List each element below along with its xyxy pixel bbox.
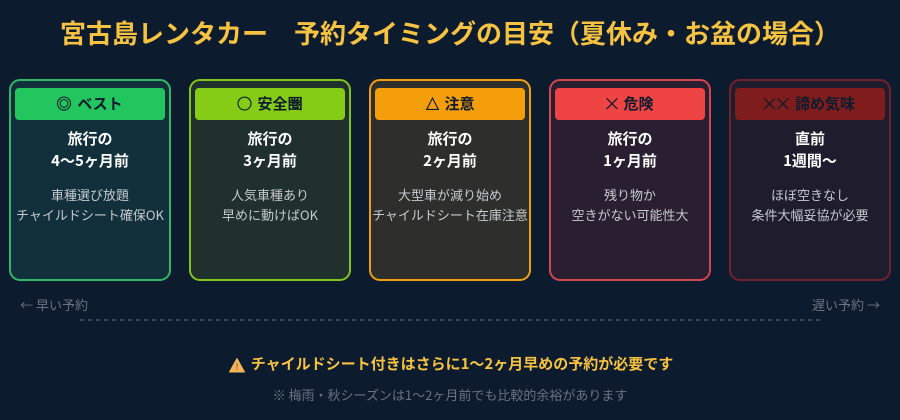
label: give up: 諦め気味 (795, 93, 855, 114)
footnote: ※ 梅雨・秋シーズンは1〜2ヶ月前でも比較的余裕があります (273, 385, 627, 404)
timing: caution (423, 128, 477, 171)
label: danger (555, 88, 705, 120)
description: caution (372, 185, 528, 224)
label: later booking: 遅い予約 → (812, 295, 880, 314)
panel: best (10, 80, 170, 280)
panel: give up (730, 80, 890, 280)
description: safe (222, 185, 319, 224)
label: earlier booking: ← 早い予約 (20, 295, 88, 314)
panel: danger (550, 80, 710, 280)
label: caution: △ (424, 96, 441, 113)
label: danger: × (603, 90, 621, 116)
description: danger: 空きがない可能性大 (571, 205, 689, 224)
label: best: ◎ (56, 96, 72, 113)
timing: caution: 旅行の (427, 128, 473, 149)
timing: caution: 2ヶ月前 (423, 150, 477, 171)
panel: caution (370, 80, 530, 280)
description: best: 車種選び放題 (51, 185, 129, 204)
icon: warning (230, 358, 244, 372)
label: best (15, 88, 165, 120)
description: give up (751, 185, 869, 224)
description: caution: チャイルドシート在庫注意 (372, 205, 528, 224)
timing: best (51, 128, 129, 171)
title: 宮古島レンタカー 予約タイミングの目安（夏休み・お盆の場合） (60, 14, 840, 51)
label: safe: 安全圏 (257, 93, 303, 114)
timing: best: 旅行の (67, 128, 113, 149)
callout: child seat warning: チャイルドシート付きはさらに1〜2ヶ月早めの予約が必要です (251, 353, 673, 374)
timing: danger (603, 128, 657, 171)
timing: safe: 旅行の (247, 128, 293, 149)
description: safe: 人気車種あり (231, 185, 309, 204)
label: give up: × (774, 90, 792, 116)
timing: give up: 直前 (795, 128, 825, 149)
description: best (16, 185, 165, 224)
timing: best: 4〜5ヶ月前 (51, 150, 129, 171)
label: give up: × (760, 90, 778, 116)
label: best: ベスト (77, 93, 123, 114)
description: danger: 残り物か (604, 185, 656, 204)
description: give up: 条件大幅妥協が必要 (751, 205, 869, 224)
description: caution: 大型車が減り始め (398, 185, 502, 204)
timing: give up (783, 128, 837, 171)
label: caution (375, 88, 525, 120)
label: danger: 危険 (623, 93, 654, 114)
timing: danger: 1ヶ月前 (603, 150, 657, 171)
label: caution: 注意 (444, 93, 475, 114)
label: give up (735, 88, 885, 120)
timing: safe: 3ヶ月前 (243, 150, 297, 171)
description: safe: 早めに動けばOK (222, 205, 319, 224)
timing: give up: 1週間〜 (783, 150, 837, 171)
description: best: チャイルドシート確保OK (16, 205, 165, 224)
timing: danger: 旅行の (607, 128, 653, 149)
description: give up: ほぼ空きなし (771, 185, 849, 204)
panel: safe (190, 80, 350, 280)
description: danger (571, 185, 689, 224)
label: safe: ○ (236, 96, 253, 113)
timing: safe (243, 128, 297, 171)
label: safe (195, 88, 345, 120)
